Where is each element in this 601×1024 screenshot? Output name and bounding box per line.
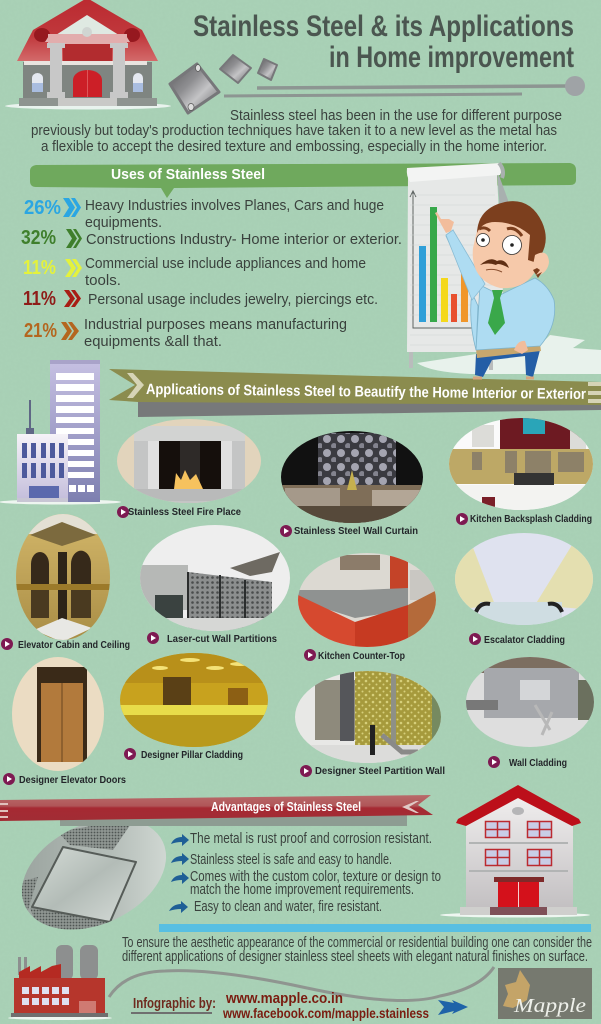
photo: kitchen counter-top <box>298 553 438 648</box>
item: 11 percent commercial: Commercial use include appliances and home <box>85 255 366 272</box>
item: 11 percent personal <box>23 288 378 310</box>
photo: elevator doors <box>12 656 104 771</box>
item: 21 percent industrial: 21% <box>24 320 57 342</box>
item: 11 percent personal: 11% <box>23 288 56 310</box>
photo: laser-cut partitions <box>140 525 290 631</box>
item: 11 percent commercial <box>23 255 366 289</box>
credit: infographic by: Infographic by: <box>133 995 216 1012</box>
photo: kitchen backsplash <box>449 418 593 510</box>
credit: infographic by <box>131 995 216 1014</box>
photo: partition wall <box>295 671 442 763</box>
item: 11 percent commercial: tools. <box>85 272 121 289</box>
item: 11 percent personal: Personal usage includes jewelry, piercings etc. <box>88 291 378 308</box>
illustration: shadow under presenter <box>417 335 601 374</box>
item: 32 percent construction <box>21 227 402 249</box>
list: uses of stainless steel <box>21 197 402 350</box>
intro paragraph: Stainless steel has been in the use for different purpose <box>230 107 562 124</box>
item: 21 percent industrial: Industrial purposes means manufacturing <box>84 316 347 333</box>
caption: escalator: Escalator Cladding <box>484 634 565 646</box>
illustration: man presenting a bar chart on a flipchart <box>407 163 555 378</box>
caption: elevator cabin <box>1 638 130 651</box>
icon: factory <box>8 945 112 1020</box>
caption: fire place: Stainless Steel Fire Place <box>128 506 241 518</box>
banner: advantages <box>0 795 433 826</box>
divider: blue bar <box>159 924 591 932</box>
caption: kitchen counter-top <box>304 649 405 662</box>
icon: blue arrow <box>438 1000 468 1015</box>
item: 26 percent heavy industries: Heavy Industries involves Planes, Cars and huge <box>85 197 384 214</box>
intro paragraph: a flexible to accept the desired texture and embossing, especially in the home interior. <box>41 138 547 155</box>
caption: elevator cabin: Elevator Cabin and Ceiling <box>18 639 130 651</box>
photo: pillar cladding <box>120 653 268 748</box>
caption: wall curtain: Stainless Steel Wall Curtain <box>294 525 418 537</box>
photo: fire place <box>117 419 261 504</box>
caption: wall cladding <box>488 756 567 769</box>
banner: uses of stainless steel <box>30 163 576 198</box>
item: 26 percent heavy industries: equipments. <box>85 214 162 231</box>
item: 21 percent industrial: equipments &all that. <box>84 333 222 350</box>
advantage: custom color <box>171 868 441 898</box>
intro paragraph <box>31 107 562 155</box>
credit: links: www.facebook.com/mapple.stainless <box>222 1005 429 1021</box>
advantage: safe: Stainless steel is safe and easy to handle. <box>190 851 392 868</box>
item: 32 percent construction: 32% <box>21 227 56 249</box>
bar chart <box>419 207 468 322</box>
caption: pillar cladding: Designer Pillar Cladding <box>141 749 243 761</box>
caption: escalator <box>469 633 565 646</box>
advantage: safe <box>171 851 392 868</box>
photo: wall curtain <box>281 431 423 523</box>
decorative line with knob <box>224 76 585 96</box>
caption: partition wall: Designer Steel Partition Wall <box>315 765 445 777</box>
closing paragraph <box>122 934 592 965</box>
icon: house with red door <box>440 785 590 918</box>
icon: steel plates <box>170 55 277 113</box>
list: advantages <box>169 830 441 915</box>
advantage: rust proof: The metal is rust proof and corrosion resistant. <box>190 830 432 847</box>
photo: elevator cabin <box>16 514 110 642</box>
advantage: easy to clean: Easy to clean and water, fire resistant. <box>194 898 382 915</box>
banner: applications <box>109 369 601 417</box>
caption: wall cladding: Wall Cladding <box>509 757 567 769</box>
image: stainless steel plate on perforated sheet <box>22 826 166 930</box>
item: 11 percent commercial: 11% <box>23 257 56 279</box>
item: 32 percent construction: Constructions Industry- Home interior or exterior. <box>86 231 402 248</box>
banner: uses of stainless steel: Uses of Stainless Steel <box>111 166 265 183</box>
logo: mapple: Mapple <box>513 995 586 1017</box>
advantage: custom color: Comes with the custom color, texture or design to <box>190 868 441 885</box>
item: 21 percent industrial <box>24 316 347 350</box>
logo: mapple <box>498 968 592 1019</box>
title <box>193 10 574 74</box>
banner: advantages: Advantages of Stainless Steel <box>211 800 361 814</box>
photo: wall cladding <box>466 657 595 748</box>
caption: elevator doors: Designer Elevator Doors <box>19 774 126 786</box>
item: 26 percent heavy industries: 26% <box>24 197 61 219</box>
caption: laser-cut partitions: Laser-cut Wall Partitions <box>167 633 277 645</box>
credit: links: www.mapple.co.in <box>225 990 343 1007</box>
advantage: custom color: match the home improvement requirements. <box>190 881 414 898</box>
icon: office buildings <box>0 360 121 504</box>
icon: house with columns <box>5 0 171 110</box>
caption: pillar cladding <box>124 748 243 761</box>
photo: escalator <box>455 533 594 626</box>
caption: kitchen counter-top: Kitchen Counter-Top <box>318 650 405 662</box>
decorative swoosh <box>109 967 494 1000</box>
item: 26 percent heavy industries <box>24 197 384 231</box>
credit: links <box>222 990 429 1021</box>
advantage: easy to clean <box>169 898 382 915</box>
